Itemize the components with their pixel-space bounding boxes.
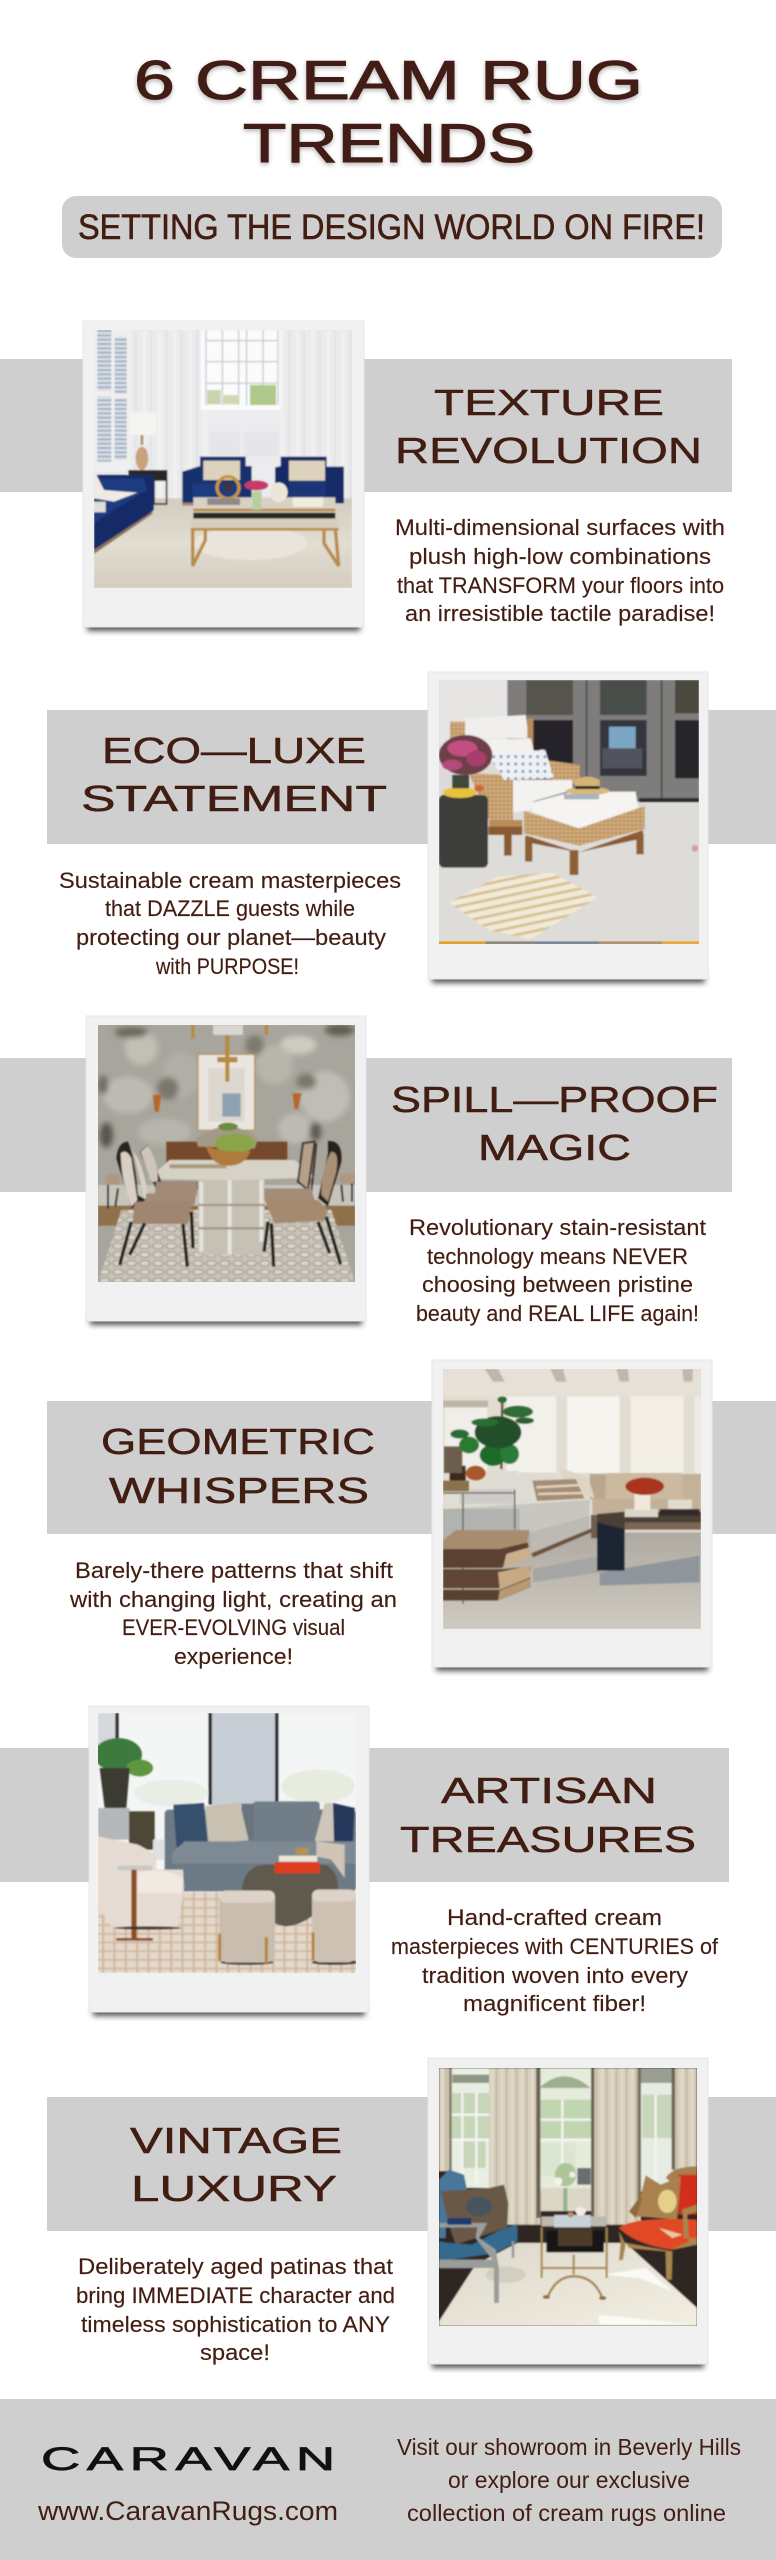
title: 6 CREAM RUG	[134, 49, 643, 111]
body text	[59, 868, 401, 979]
body text: that DAZZLE guests while	[105, 896, 355, 921]
logo: CARAVAN	[41, 2442, 335, 2477]
section 4: geometric whispers	[47, 1360, 776, 1671]
band	[0, 1748, 729, 1882]
body text	[76, 2254, 395, 2365]
footer band	[0, 2399, 776, 2560]
heading: STATEMENT	[81, 778, 387, 819]
body text: plush high-low combinations	[409, 544, 711, 569]
body text: experience!	[174, 1644, 293, 1669]
body text: Barely-there patterns that shift	[75, 1558, 393, 1583]
photo: dining room with watercolor wallpaper	[98, 1025, 355, 1282]
polaroid card 2	[428, 672, 708, 983]
band	[47, 2097, 776, 2231]
body text: protecting our planet—beauty	[76, 925, 386, 950]
heading: VINTAGE	[130, 2120, 342, 2161]
heading	[101, 1421, 375, 1511]
body text	[395, 515, 725, 626]
heading	[130, 2120, 342, 2209]
body text: timeless sophistication to ANY	[81, 2312, 390, 2337]
heading: ECO—LUXE	[102, 730, 366, 771]
heading: LUXURY	[131, 2168, 337, 2209]
body text: Revolutionary stain-resistant	[409, 1215, 706, 1240]
heading: ARTISAN	[441, 1770, 657, 1811]
body text: EVER-EVOLVING visual	[122, 1615, 345, 1640]
polaroid card 3	[86, 1016, 366, 1325]
heading: SPILL—PROOF	[391, 1079, 718, 1120]
body text: Multi-dimensional surfaces with	[395, 515, 725, 540]
body text: choosing between pristine	[422, 1272, 693, 1297]
title	[134, 49, 643, 174]
call to action: collection of cream rugs online	[407, 2500, 726, 2526]
polaroid card 6	[428, 2058, 708, 2368]
body text: with changing light, creating an	[69, 1587, 397, 1612]
body text: beauty and REAL LIFE again!	[416, 1301, 699, 1326]
band	[47, 710, 776, 844]
photo: living room with blue armchairs	[94, 330, 352, 588]
call to action	[397, 2434, 741, 2526]
body text: space!	[200, 2340, 270, 2365]
section 1: texture revolution	[0, 321, 732, 631]
section 2: eco-luxe statement	[47, 672, 776, 983]
heading: MAGIC	[478, 1127, 631, 1168]
body text: that TRANSFORM your floors into	[397, 573, 724, 598]
subtitle pill	[62, 196, 722, 258]
title: TRENDS	[243, 112, 535, 174]
body text: tradition woven into every	[422, 1963, 688, 1988]
heading	[395, 382, 702, 471]
body text	[409, 1215, 706, 1326]
polaroid card 1	[83, 321, 364, 631]
band	[0, 1058, 732, 1192]
section 3: spill-proof magic	[0, 1016, 732, 1326]
body text: an irresistible tactile paradise!	[405, 601, 715, 626]
call to action: Visit our showroom in Beverly Hills	[397, 2434, 741, 2460]
heading: WHISPERS	[109, 1470, 369, 1511]
photo: salon with red and blue chairs	[439, 2068, 697, 2326]
heading: TEXTURE	[434, 382, 664, 423]
footer	[0, 2399, 776, 2560]
call to action: or explore our exclusive	[448, 2467, 690, 2493]
photo: patio chair and ottoman	[439, 680, 699, 944]
body text: magnificent fiber!	[463, 1991, 646, 2016]
heading	[391, 1079, 718, 1168]
section 5: artisan treasures	[0, 1706, 729, 2016]
heading	[400, 1770, 696, 1860]
heading: REVOLUTION	[395, 430, 702, 471]
subtitle pill: SETTING THE DESIGN WORLD ON FIRE!	[78, 208, 705, 247]
body text: Hand-crafted cream	[447, 1905, 662, 1930]
body text	[69, 1558, 397, 1669]
band	[47, 1401, 776, 1534]
body text: technology means NEVER	[427, 1244, 688, 1269]
body text: with PURPOSE!	[155, 954, 299, 979]
body text: bring IMMEDIATE character and	[76, 2283, 395, 2308]
photo: sectional sofa and sculptural stool	[443, 1369, 701, 1629]
heading: TREASURES	[400, 1819, 696, 1860]
section 6: vintage luxury	[47, 2058, 776, 2368]
body text: masterpieces with CENTURIES of	[391, 1934, 719, 1959]
website: www.CaravanRugs.com	[37, 2496, 338, 2526]
body text: Deliberately aged patinas that	[78, 2254, 393, 2279]
body text: Sustainable cream masterpieces	[59, 868, 401, 893]
heading	[81, 730, 387, 819]
heading: GEOMETRIC	[101, 1421, 375, 1462]
photo: grey sofa with stools	[98, 1713, 356, 1973]
polaroid card 5	[89, 1706, 369, 2016]
band	[0, 359, 732, 492]
body text	[391, 1905, 719, 2016]
polaroid card 4	[432, 1360, 712, 1671]
